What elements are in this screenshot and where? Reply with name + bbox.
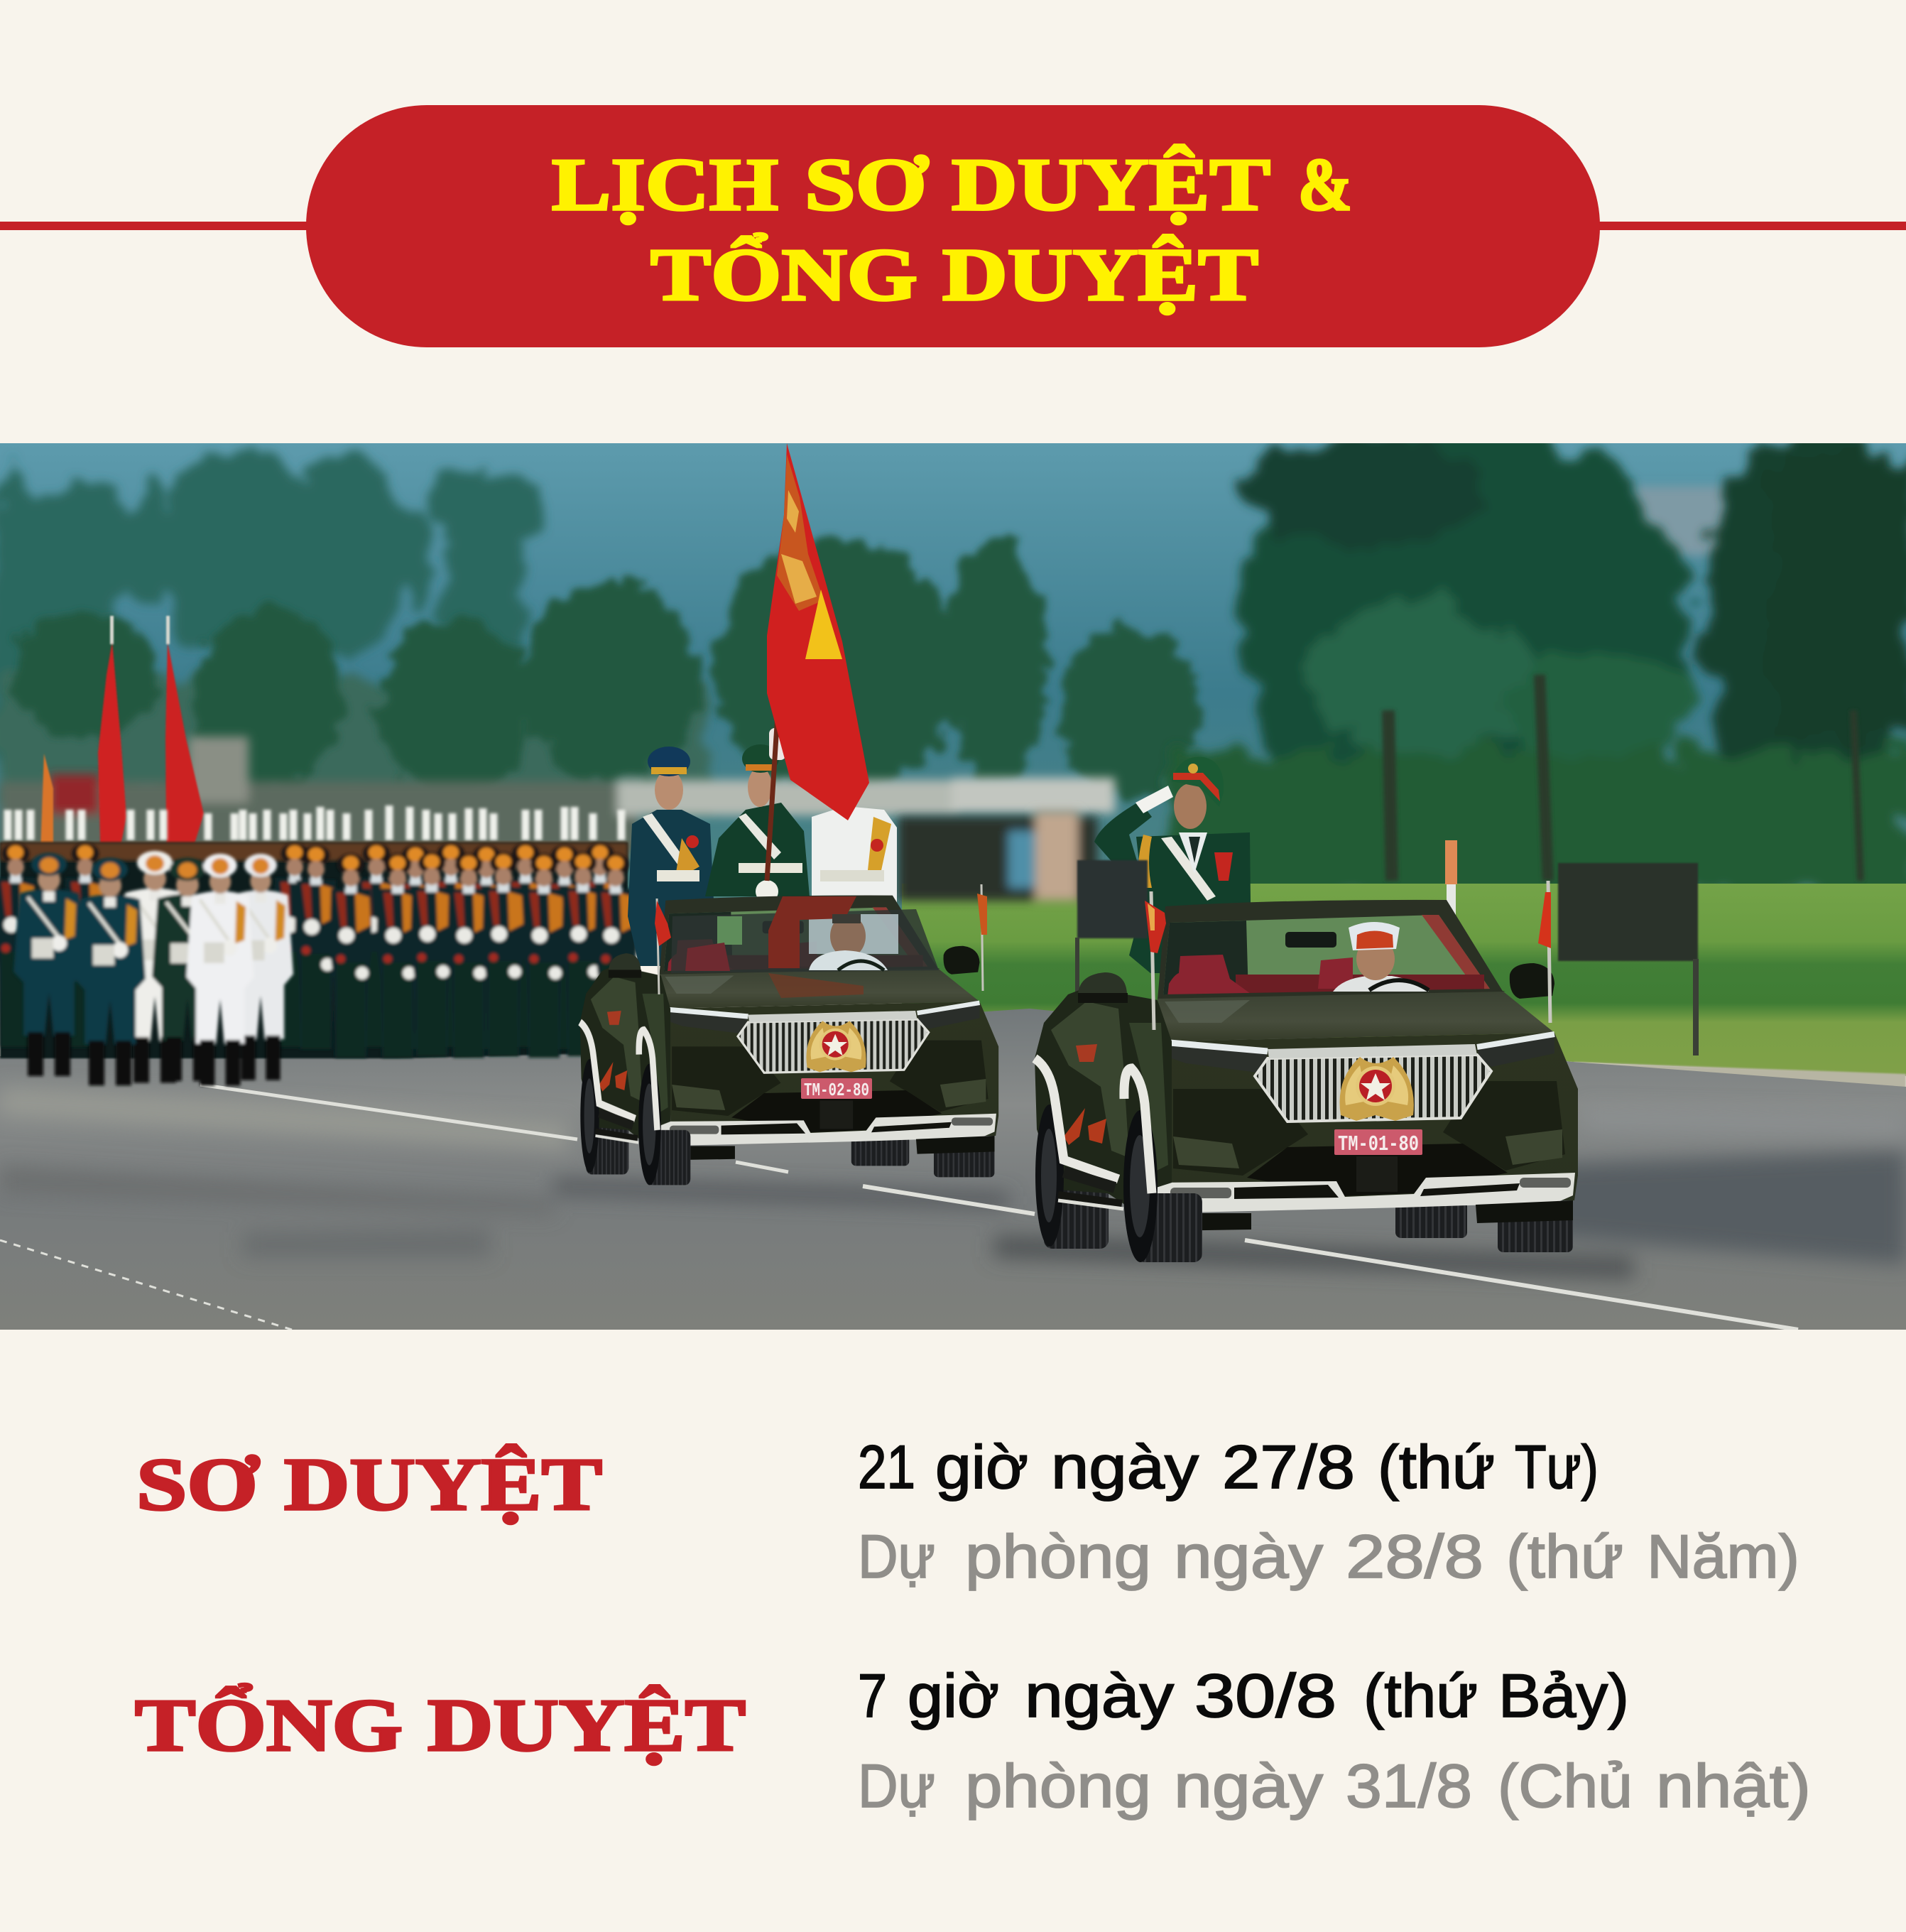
schedule: so duyet date: 27/8 (1222, 1433, 1355, 1502)
title text: & (1298, 143, 1352, 226)
column mass (0, 842, 628, 1058)
kerb (1573, 1062, 1906, 1097)
honor guard on car 1 (628, 443, 897, 966)
schedule: tong duyet label: DUYỆT (428, 1683, 746, 1767)
schedule: tong duyet date: Bảy) (1498, 1662, 1629, 1730)
schedule: tong duyet date: 7 (858, 1662, 887, 1730)
car 2 (1035, 881, 1578, 1262)
schedule: so duyet date: Tư) (1515, 1433, 1599, 1502)
marching columns (0, 842, 637, 1085)
bayonet row (8, 805, 621, 840)
car 1 pennants (655, 884, 987, 994)
road markings (0, 1085, 1798, 1330)
driver (1333, 922, 1429, 992)
schedule: so duyet backup date: Năm) (1647, 1523, 1799, 1591)
large dark trees right (1165, 419, 1906, 895)
schedule: tong duyet backup date: (Chủ (1498, 1752, 1633, 1820)
title text: TỔNG (650, 232, 917, 316)
schedule: tong duyet backup date: nhật) (1656, 1752, 1811, 1820)
front rank soldiers (13, 851, 293, 1085)
signboards (1075, 840, 1699, 1055)
national flag (767, 443, 869, 820)
schedule: so duyet label: DUYỆT (284, 1443, 602, 1526)
schedule: tong duyet date: giờ (908, 1662, 999, 1730)
schedule: so duyet label (136, 1443, 602, 1526)
midground trees left (11, 536, 1200, 803)
schedule: tong duyet date: (thứ (1363, 1662, 1478, 1730)
title text: SƠ (805, 143, 929, 226)
distant hazy trees (0, 447, 710, 803)
schedule: tong duyet date: 30/8 (1194, 1662, 1336, 1730)
rifle stock band (0, 842, 628, 861)
schedule: tong duyet backup date: ngày (1174, 1752, 1323, 1820)
band rule left and right (0, 222, 1906, 230)
title text: DUYỆT (952, 143, 1270, 226)
schedule: so duyet backup date (858, 1523, 1799, 1591)
schedule: tong duyet date: ngày (1025, 1662, 1174, 1730)
flag pole (767, 703, 778, 881)
tree trunks (1388, 675, 1861, 881)
schedule: tong duyet backup date: 31/8 (1346, 1752, 1472, 1820)
schedule: so duyet backup date: ngày (1174, 1523, 1323, 1591)
title text: DUYỆT (942, 233, 1258, 316)
schedule: so duyet backup date: Dự (858, 1523, 935, 1591)
commander on car 2 (1094, 757, 1251, 973)
plate TM-02-80: TM-02-80 (804, 1080, 869, 1101)
schedule: so duyet label: SƠ (136, 1443, 260, 1526)
schedule: so duyet date: ngày (1051, 1433, 1199, 1502)
title text: LỊCH (552, 143, 778, 226)
army guard (705, 728, 810, 903)
schedule: tong duyet label (135, 1683, 746, 1767)
title text (552, 143, 1352, 316)
pale building far right (1633, 487, 1731, 555)
navy guard (812, 806, 897, 916)
title pill (306, 105, 1600, 347)
left red banners (40, 616, 204, 895)
photo backdrop: mountain sky (0, 443, 1906, 940)
road shadows and patches (0, 1087, 1906, 1279)
plate TM-01-80: TM-01-80 (1338, 1132, 1419, 1157)
schedule: so duyet date: giờ (935, 1433, 1028, 1502)
photo: parade rehearsal (0, 419, 1906, 1330)
grass (902, 884, 1906, 1076)
rear rows of soldiers (0, 843, 637, 1058)
schedule: so duyet backup date: (thứ (1506, 1523, 1623, 1591)
schedule: tong duyet backup date (858, 1752, 1811, 1820)
background crowd (898, 811, 1097, 901)
windshield view car 1 (671, 896, 939, 998)
schedule: so duyet date (858, 1433, 1599, 1502)
schedule: tong duyet backup date: Dự (858, 1752, 935, 1820)
road (0, 1009, 1906, 1330)
schedule: so duyet backup date: phòng (965, 1523, 1151, 1591)
midground buildings (0, 737, 1115, 852)
schedule: so duyet date: (thứ (1378, 1433, 1495, 1502)
schedule: tong duyet backup date: phòng (965, 1752, 1151, 1820)
car 1 (580, 884, 998, 1185)
car 2 pennants (1145, 881, 1551, 1030)
schedule: so duyet backup date: 28/8 (1346, 1523, 1483, 1591)
air force guard (628, 747, 714, 966)
schedule: so duyet date: 21 (858, 1433, 915, 1502)
schedule: tong duyet date (858, 1662, 1629, 1730)
schedule: tong duyet label: TỔNG (135, 1683, 403, 1767)
title band (0, 105, 1906, 347)
